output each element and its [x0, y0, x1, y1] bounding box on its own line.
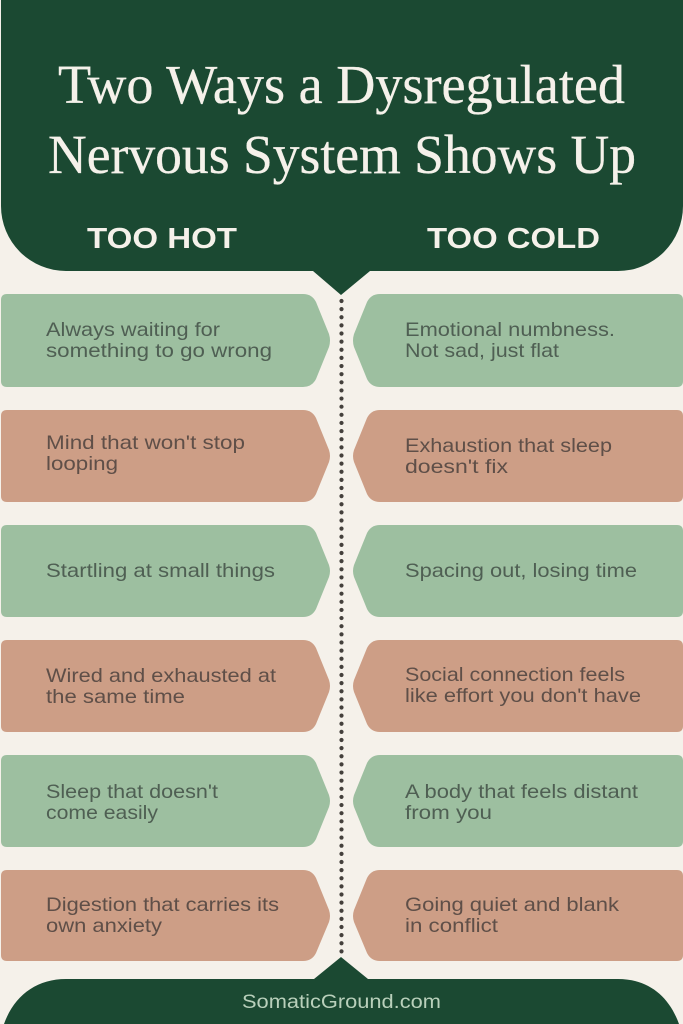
- row 4 right: [353, 640, 683, 732]
- row 2 left: looping: [46, 453, 118, 475]
- row 4 left: Wired and exhausted at: [46, 665, 277, 687]
- row 1 right: Emotional numbness.: [405, 319, 615, 341]
- row 1 left: Always waiting for: [46, 319, 221, 341]
- row 5 right: A body that feels distant: [405, 781, 639, 803]
- row 3 right: Spacing out, losing time: [405, 560, 637, 582]
- row 2 left: Mind that won't stop: [46, 432, 245, 454]
- row 3 left: [1, 525, 330, 617]
- row 6 left: [1, 870, 330, 961]
- row 1 left: something to go wrong: [46, 340, 272, 362]
- row 5 right: [353, 755, 683, 847]
- dotted divider: [339, 301, 344, 956]
- row 1 right: Not sad, just flat: [405, 340, 560, 362]
- row 5 right: from you: [405, 802, 492, 824]
- heading: too hot: TOO HOT: [87, 223, 237, 255]
- row 6 left: Digestion that carries its: [46, 894, 279, 916]
- footer banner: [4, 957, 679, 1024]
- footer website: SomaticGround.com: [242, 992, 441, 1013]
- title: [48, 54, 636, 185]
- row 2 right: doesn't fix: [405, 456, 508, 478]
- row 2 right: [353, 410, 683, 502]
- row 6 right: [353, 870, 683, 961]
- row 5 left: [1, 755, 330, 847]
- row 6 right: Going quiet and blank: [405, 894, 619, 916]
- row 6 right: in conflict: [405, 915, 499, 937]
- row 4 left: the same time: [46, 686, 185, 708]
- heading: too cold: TOO COLD: [427, 223, 600, 255]
- row 1 left: [1, 294, 330, 387]
- row 2 left: [1, 410, 330, 502]
- row 2 right: Exhaustion that sleep: [405, 435, 612, 457]
- title: Two Ways a Dysregulated: [58, 54, 625, 115]
- row 4 right: like effort you don't have: [405, 685, 641, 707]
- row 4 right: Social connection feels: [405, 664, 625, 686]
- row 3 left: Startling at small things: [46, 560, 275, 582]
- row 6 left: own anxiety: [46, 915, 162, 937]
- title: Nervous System Shows Up: [48, 124, 636, 185]
- row 4 left: [1, 640, 330, 732]
- row 3 right: [353, 525, 683, 617]
- row 1 right: [353, 294, 683, 387]
- header banner: [1, 0, 683, 295]
- row 5 left: come easily: [46, 802, 158, 824]
- row 5 left: Sleep that doesn't: [46, 781, 219, 803]
